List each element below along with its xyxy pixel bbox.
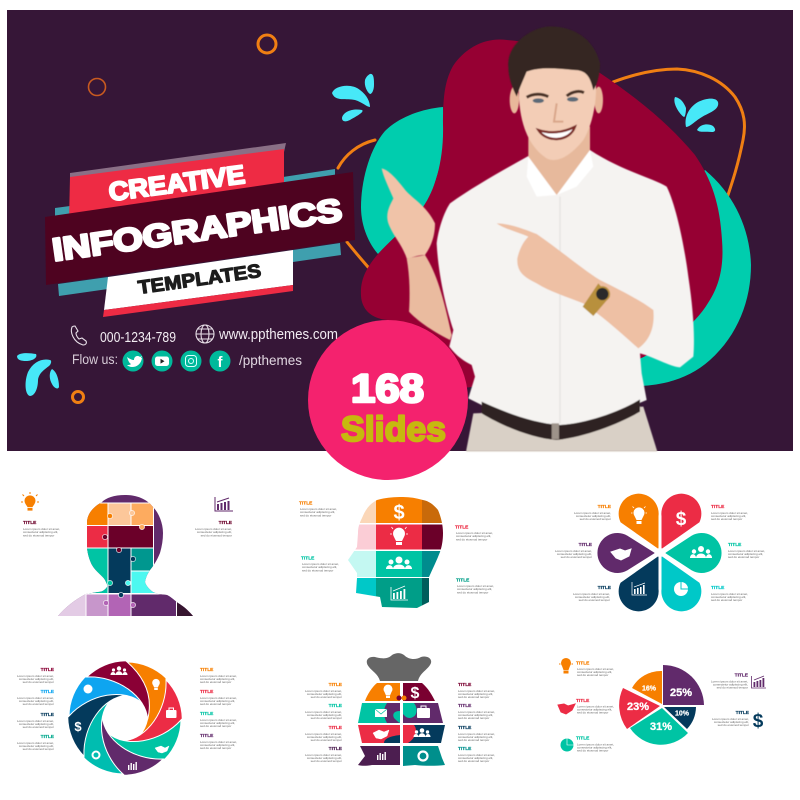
label: title orange: Lorem ipsum dolor sit amet, [305,689,342,693]
label: title orange: Lorem ipsum dolor sit amet, [574,511,611,515]
label: title navy [573,585,612,602]
banner background [7,10,793,451]
icon: briefcase [417,706,430,718]
label: title purple: TITLE [200,733,214,739]
label: title purple [555,542,593,559]
icon: bulb [152,679,160,690]
label: title dark teal: TITLE [456,578,470,584]
label: title green: Lorem ipsum dolor sit amet, [17,741,54,745]
label: title orange [576,660,614,677]
label: title dark purple: sed do eiusmod tempor [458,716,489,720]
label: title red: consectetur adipiscing elit, [307,735,342,739]
label: title cyan [711,585,748,602]
icon: bulb orange [21,492,39,511]
bag row 2 left [358,703,400,723]
teal blob right [600,170,751,386]
badge: 168 slides [308,320,468,480]
label: title orange: TITLE [329,682,343,688]
label: title right: sed do eiusmod tempor [201,533,232,537]
label: title orange: Lorem ipsum dolor sit amet, [300,507,337,511]
label: title dark purple: consectetur adipiscing elit, [458,713,493,717]
ribbon: red underline [103,285,293,317]
label: title red: Lorem ipsum dolor sit amet, [711,511,748,515]
label: title dark teal: consectetur adipiscing elit, [457,587,492,591]
label: title teal: TITLE [200,711,214,717]
label: title navy: consectetur adipiscing elit, [19,722,54,726]
icon: dollar: $ [393,502,405,524]
text: website: www.ppthemes.com [218,326,338,343]
icon: pie [84,684,92,694]
label: title teal: Lorem ipsum dolor sit amet, [200,718,237,722]
label: title navy: Lorem ipsum dolor sit amet, [573,592,610,596]
label: title left: consectetur adipiscing elit, [23,530,58,534]
orange ring small [72,392,84,402]
label: title red: sed do eiusmod tempor [200,702,231,706]
label: title purple: Lorem ipsum dolor sit amet, [555,549,592,553]
icon: globe [196,325,214,343]
icon: ring [418,752,428,760]
crimson blob [361,40,722,390]
label: title navy [712,710,750,727]
label: title left: sed do eiusmod tempor [23,533,54,537]
label: title purple: consectetur adipiscing elit, [713,682,748,686]
bag row 3 left [358,725,400,743]
label: title red: Lorem ipsum dolor sit amet, [456,531,493,535]
label: title navy: sed do eiusmod tempor [458,738,489,742]
icon: twitter [122,350,144,372]
pie slice: 23 percent [619,688,660,729]
cyan splash top [332,74,374,121]
label: title sea green: sed do eiusmod tempor [458,759,489,763]
text: templates: TEMPLATES [137,261,262,299]
label: title navy: consectetur adipiscing elit, [575,595,610,599]
label: title red: Lorem ipsum dolor sit amet, [200,696,237,700]
text: phone number: 000-1234-789 [100,330,176,346]
label: title navy [458,725,495,742]
label: title teal: TITLE [576,736,590,742]
icon: bulb white [390,527,408,545]
label: title purple [711,672,749,690]
value: 25%: 25% [670,687,692,699]
label: title purple: TITLE [329,746,343,752]
label: title teal: consectetur adipiscing elit, [307,713,342,717]
label: title red: TITLE [576,698,590,704]
label: title purple: Lorem ipsum dolor sit amet, [305,753,342,757]
label: title red: TITLE [711,504,725,510]
label: title red: sed do eiusmod tempor [456,537,487,541]
bag row 4 right [403,746,445,766]
label: title orange: Lorem ipsum dolor sit amet, [577,667,614,671]
panel: hero banner [7,10,793,480]
label: title maroon: Lorem ipsum dolor sit amet, [17,674,54,678]
label: title navy: Lorem ipsum dolor sit amet, [458,732,495,736]
chart: segmented head [348,497,443,608]
icon: dollar navy: $ [753,711,764,732]
label: title red: consectetur adipiscing elit, [200,699,235,703]
label: title orange: consectetur adipiscing elit, [200,677,235,681]
label: title navy: TITLE [736,710,750,716]
label: title navy: sed do eiusmod tempor [23,725,54,729]
panel: money bag slide [305,653,495,766]
label: title purple: TITLE [735,672,749,678]
label: title dark teal [456,578,494,594]
label: title green: sed do eiusmod tempor [23,747,54,751]
label: title orange: TITLE [299,500,313,506]
label: title purple: Lorem ipsum dolor sit amet, [711,680,748,684]
petal: purple [598,534,654,572]
panel: puzzle head slide [21,490,233,620]
panel: spiral slide [17,649,237,787]
icon: facebook: f [218,354,224,371]
label: title blue [17,689,55,706]
icon: dollar: $ [411,685,420,702]
icon: handshake [155,746,169,753]
label: title orange [305,682,343,699]
pie slice: 31 percent [630,708,688,745]
label: title maroon [17,667,55,684]
panel: pie chart slide [558,658,766,752]
petal: cyan [662,557,701,611]
icon: phone [71,326,86,345]
label: title red: TITLE [200,689,214,695]
text: infographics: INFOGRAPHICS [50,192,344,268]
text: creative: CREATIVE [107,159,247,207]
label: title blue: sed do eiusmod tempor [23,702,54,706]
bag tie [367,653,431,681]
icon: pie teal [560,738,574,752]
label: title red: sed do eiusmod tempor [711,517,742,521]
orange ring thin [88,78,106,96]
icon: pie [674,582,688,596]
label: title green: consectetur adipiscing elit, [19,744,54,748]
label: title red: Lorem ipsum dolor sit amet, [577,704,614,708]
bag row 4 left [358,746,400,766]
label: title cyan: sed do eiusmod tempor [711,598,742,602]
pie slice: 10 percent [664,707,696,729]
label: title orange: sed do eiusmod tempor [200,680,231,684]
icon: youtube [152,350,172,372]
label: title navy [17,712,55,729]
label: title orange: sed do eiusmod tempor [300,513,331,517]
label: title maroon: sed do eiusmod tempor [23,680,54,684]
label: title teal: consectetur adipiscing elit, [577,746,612,750]
label: title red: consectetur adipiscing elit, [577,708,612,712]
label: title maroon: sed do eiusmod tempor [458,695,489,699]
label: title red: TITLE [455,524,469,530]
icon: dollar: $ [676,509,687,530]
label: title purple: sed do eiusmod tempor [200,746,231,750]
label: title orange: consectetur adipiscing elit, [307,692,342,696]
panel: profile head slide [299,490,494,610]
label: title teal: TITLE [301,556,315,562]
label: title teal [576,736,614,752]
label: title orange: Lorem ipsum dolor sit amet, [200,674,237,678]
petal: navy [619,557,658,611]
icon: people white [386,556,412,569]
label: title teal: consectetur adipiscing elit, [200,721,235,725]
label: title purple: consectetur adipiscing elit, [307,756,342,760]
ribbon: dark maroon band [45,172,355,285]
icon: people [690,546,712,558]
label: title maroon: consectetur adipiscing elit, [458,692,493,696]
label: title cyan: Lorem ipsum dolor sit amet, [711,592,748,596]
label: title red: sed do eiusmod tempor [311,738,342,742]
label: title sea green [458,746,495,763]
icon: handshake red [558,704,575,714]
label: title sea green: consectetur adipiscing elit, [458,756,493,760]
label: title teal: consectetur adipiscing elit, [728,552,763,556]
orange outline blob [338,69,744,267]
text: follow us: Flow us: [72,351,118,367]
label: title purple: TITLE [579,542,593,548]
icon: chart white [391,586,408,600]
icon: bulb [631,506,647,524]
label: title maroon: consectetur adipiscing elit, [19,677,54,681]
label: title navy: sed do eiusmod tempor [718,723,749,727]
label: title purple: sed do eiusmod tempor [717,686,748,690]
icon: ring [92,752,100,758]
label: title red: consectetur adipiscing elit, [711,514,746,518]
label: title maroon: Lorem ipsum dolor sit amet, [458,689,495,693]
label: title orange: TITLE [576,660,590,666]
cyan splash right [674,97,718,132]
label: title teal: TITLE [728,542,742,548]
bag row 1 left [365,683,400,701]
bag row 1 right [396,683,435,701]
badge number: 168 [351,367,424,411]
label: title orange [299,500,337,517]
label: title orange: consectetur adipiscing elit, [577,670,612,674]
icon: chart [632,582,647,595]
label: title right: Lorem ipsum dolor sit amet, [195,527,232,531]
icon: handshake [611,549,631,560]
icon: chart [128,762,137,770]
petal: red [662,494,701,548]
value: 23%: 23% [627,701,649,713]
label: title purple: sed do eiusmod tempor [561,555,592,559]
label: title red [455,524,493,541]
label: title navy: sed do eiusmod tempor [579,598,610,602]
icon: bulb orange [559,658,573,674]
label: title teal [301,556,339,572]
label: title dark purple: TITLE [458,703,472,709]
label: title blue: consectetur adipiscing elit, [19,699,54,703]
label: title orange [574,504,612,521]
label: title teal [728,542,765,559]
label: title sea green: TITLE [458,746,472,752]
label: title dark teal: Lorem ipsum dolor sit amet, [457,584,494,588]
icon: instagram [180,350,202,372]
label: title left: Lorem ipsum dolor sit amet, [23,527,60,531]
icon: chart purple [215,497,233,511]
icon: envelope [375,709,387,717]
label: title teal: sed do eiusmod tempor [728,555,759,559]
label: title navy: TITLE [41,712,55,718]
label: title navy: consectetur adipiscing elit, [714,720,749,724]
label: title teal: Lorem ipsum dolor sit amet, [577,742,614,746]
label: title orange: sed do eiusmod tempor [577,673,608,677]
teal blob left [361,107,445,254]
label: title orange: sed do eiusmod tempor [311,695,342,699]
label: title dark purple [458,703,495,720]
label: title teal: sed do eiusmod tempor [302,568,333,572]
label: title red [576,698,614,714]
icon: facebook [210,350,230,372]
label: title cyan: consectetur adipiscing elit, [711,595,746,599]
label: title maroon [458,682,495,699]
value: 10%: 10% [675,710,690,718]
label: title navy: TITLE [598,585,612,591]
label: title purple: sed do eiusmod tempor [311,759,342,763]
label: title purple [305,746,343,763]
pie slice: 25 percent [663,665,704,705]
label: title dark teal: sed do eiusmod tempor [457,590,488,594]
label: title green: TITLE [41,734,55,740]
label: title orange [200,667,237,684]
chart: puzzle head silhouette [58,495,193,616]
label: title navy: TITLE [458,725,472,731]
ribbon: red [69,149,284,221]
petal: orange [619,494,658,548]
label: title purple: Lorem ipsum dolor sit amet, [200,740,237,744]
icon: dollar: $ [74,719,82,734]
label: title red [305,725,343,742]
label: title teal: Lorem ipsum dolor sit amet, [302,562,339,566]
petal: teal [666,533,721,572]
label: title teal: sed do eiusmod tempor [311,716,342,720]
label: title sea green: Lorem ipsum dolor sit amet, [458,753,495,757]
label: title right: TITLE [219,520,233,526]
label: title blue: TITLE [41,689,55,695]
label: title teal [305,703,343,720]
label: title dark purple: Lorem ipsum dolor sit amet, [458,710,495,714]
ribbon: grey strip [70,143,286,179]
bag row 3 right [403,725,445,743]
label: title maroon: TITLE [458,682,472,688]
label: title purple: consectetur adipiscing elit, [200,743,235,747]
cyan splash bottom left [17,353,59,396]
label: title right: consectetur adipiscing elit, [197,530,232,534]
text: social handle: /ppthemes [239,352,302,368]
icon: chart purple [752,676,766,688]
label: title teal: sed do eiusmod tempor [200,724,231,728]
icon: bulb [384,685,392,698]
label: title orange: consectetur adipiscing elit, [576,514,611,518]
label: title purple: consectetur adipiscing elit, [557,552,592,556]
label: title navy: Lorem ipsum dolor sit amet, [17,719,54,723]
badge label: Slides [341,410,446,449]
label: title teal: sed do eiusmod tempor [577,748,608,752]
label: title orange: TITLE [598,504,612,510]
label: title red: sed do eiusmod tempor [577,710,608,714]
icon: chart [377,752,386,760]
label: title orange: TITLE [200,667,214,673]
label: title teal: TITLE [329,703,343,709]
badge circle [308,320,468,480]
chart: spiral ring [56,649,194,787]
label: title orange: sed do eiusmod tempor [580,517,611,521]
label: title red [711,504,748,521]
pie slice: 16 percent [632,671,662,704]
ribbon: teal strips [55,169,341,296]
label: title red: Lorem ipsum dolor sit amet, [305,732,342,736]
label: title purple [200,733,237,750]
label: title cyan: TITLE [711,585,725,591]
label: title red: consectetur adipiscing elit, [456,534,491,538]
label: title maroon: TITLE [41,667,55,673]
label: title orange: consectetur adipiscing elit, [300,510,335,514]
label: title teal: Lorem ipsum dolor sit amet, [305,710,342,714]
label: title left: TITLE [23,520,37,526]
label: title green [17,734,55,751]
orange ring large [258,35,276,53]
label: title red: TITLE [329,725,343,731]
label: title left [23,520,60,537]
bag row 2 right [403,703,443,723]
label: title blue: Lorem ipsum dolor sit amet, [17,696,54,700]
icon: people [414,728,430,737]
photo: smiling man pointing [382,27,694,452]
label: title teal: Lorem ipsum dolor sit amet, [728,549,765,553]
label: title teal: consectetur adipiscing elit, [302,565,337,569]
label: title teal [200,711,237,728]
label: title navy: consectetur adipiscing elit, [458,735,493,739]
label: title navy: Lorem ipsum dolor sit amet, [712,717,749,721]
icon: handshake [373,730,389,739]
value: 31%: 31% [650,721,672,733]
label: title red [200,689,237,706]
value: 16%: 16% [642,686,657,692]
ribbon: white [104,250,293,310]
label: title right [195,520,233,537]
panel: petal flower slide [555,494,765,611]
icon: people [110,666,128,675]
icon: briefcase [166,708,176,718]
